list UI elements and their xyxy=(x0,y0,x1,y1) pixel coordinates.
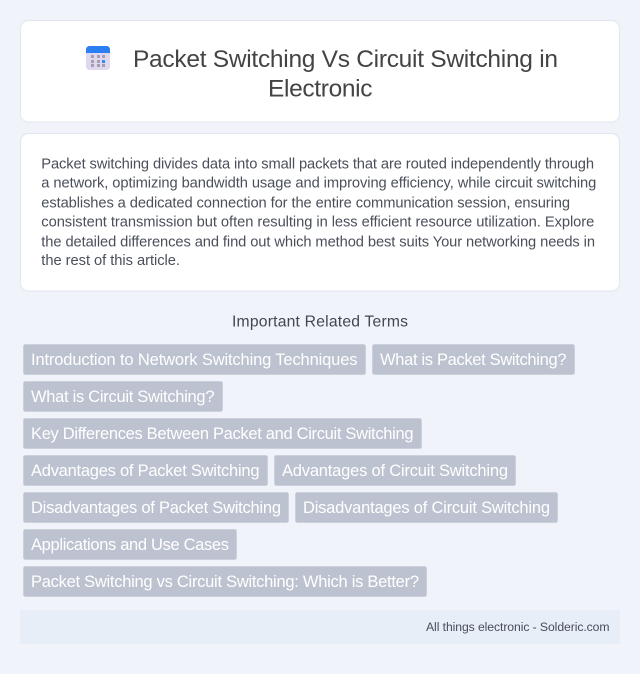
tag: disadvantages of packet switching xyxy=(24,492,288,522)
title xyxy=(133,46,558,102)
tag: key differences xyxy=(24,418,422,448)
tag: what is circuit switching xyxy=(24,382,222,412)
tag list xyxy=(24,344,574,596)
heading: related terms: Important Related Terms xyxy=(232,314,408,331)
tag: disadvantages of packet switching: Disadvantages of Packet Switching xyxy=(31,499,281,517)
tag: introduction: Introduction to Network Switching Techniques xyxy=(31,351,358,369)
panel: header card xyxy=(20,20,620,122)
panel: description xyxy=(20,134,620,291)
text block: description: consistent transmission but often resulting in less efficient resource utilization. Explore xyxy=(41,215,594,231)
tag: advantages of circuit switching xyxy=(274,456,516,486)
text block: description: the rest of this article. xyxy=(41,253,180,269)
tag: advantages of packet switching xyxy=(24,456,268,486)
tag: disadvantages of circuit switching xyxy=(296,492,558,522)
title: Packet Switching Vs Circuit Switching in xyxy=(133,46,558,73)
tag: applications xyxy=(24,530,236,560)
text block: description xyxy=(41,156,596,269)
text block: description: the detailed differences and find out which method best suits Your networking needs in xyxy=(41,234,595,250)
tag: applications: Applications and Use Cases xyxy=(31,536,229,554)
tag: which is better: Packet Switching vs Circuit Switching: Which is Better? xyxy=(31,573,419,591)
text block: description: establishes a dedicated connection for the entire communication session, ensuring xyxy=(41,195,570,211)
tag: advantages of circuit switching: Advantages of Circuit Switching xyxy=(282,462,508,480)
tag: which is better xyxy=(24,566,426,596)
tag: key differences: Key Differences Between Packet and Circuit Switching xyxy=(31,425,414,443)
icon: calendar xyxy=(86,46,110,70)
footer: All things electronic - Solderic.com xyxy=(426,620,610,634)
tag: what is circuit switching: What is Circuit Switching? xyxy=(31,388,214,406)
title: Electronic xyxy=(268,76,372,102)
footer xyxy=(20,610,620,644)
text block: description: Packet switching divides data into small packets that are routed independently through xyxy=(41,156,594,172)
tag: introduction xyxy=(24,344,366,374)
tag: what is packet switching xyxy=(372,344,574,374)
tag: advantages of packet switching: Advantages of Packet Switching xyxy=(31,462,260,480)
tag: what is packet switching: What is Packet Switching? xyxy=(380,351,566,369)
tag: disadvantages of circuit switching: Disadvantages of Circuit Switching xyxy=(303,499,550,517)
text block: description: a network, optimizing bandwidth usage and improving efficiency, while circuit switching xyxy=(41,176,596,192)
